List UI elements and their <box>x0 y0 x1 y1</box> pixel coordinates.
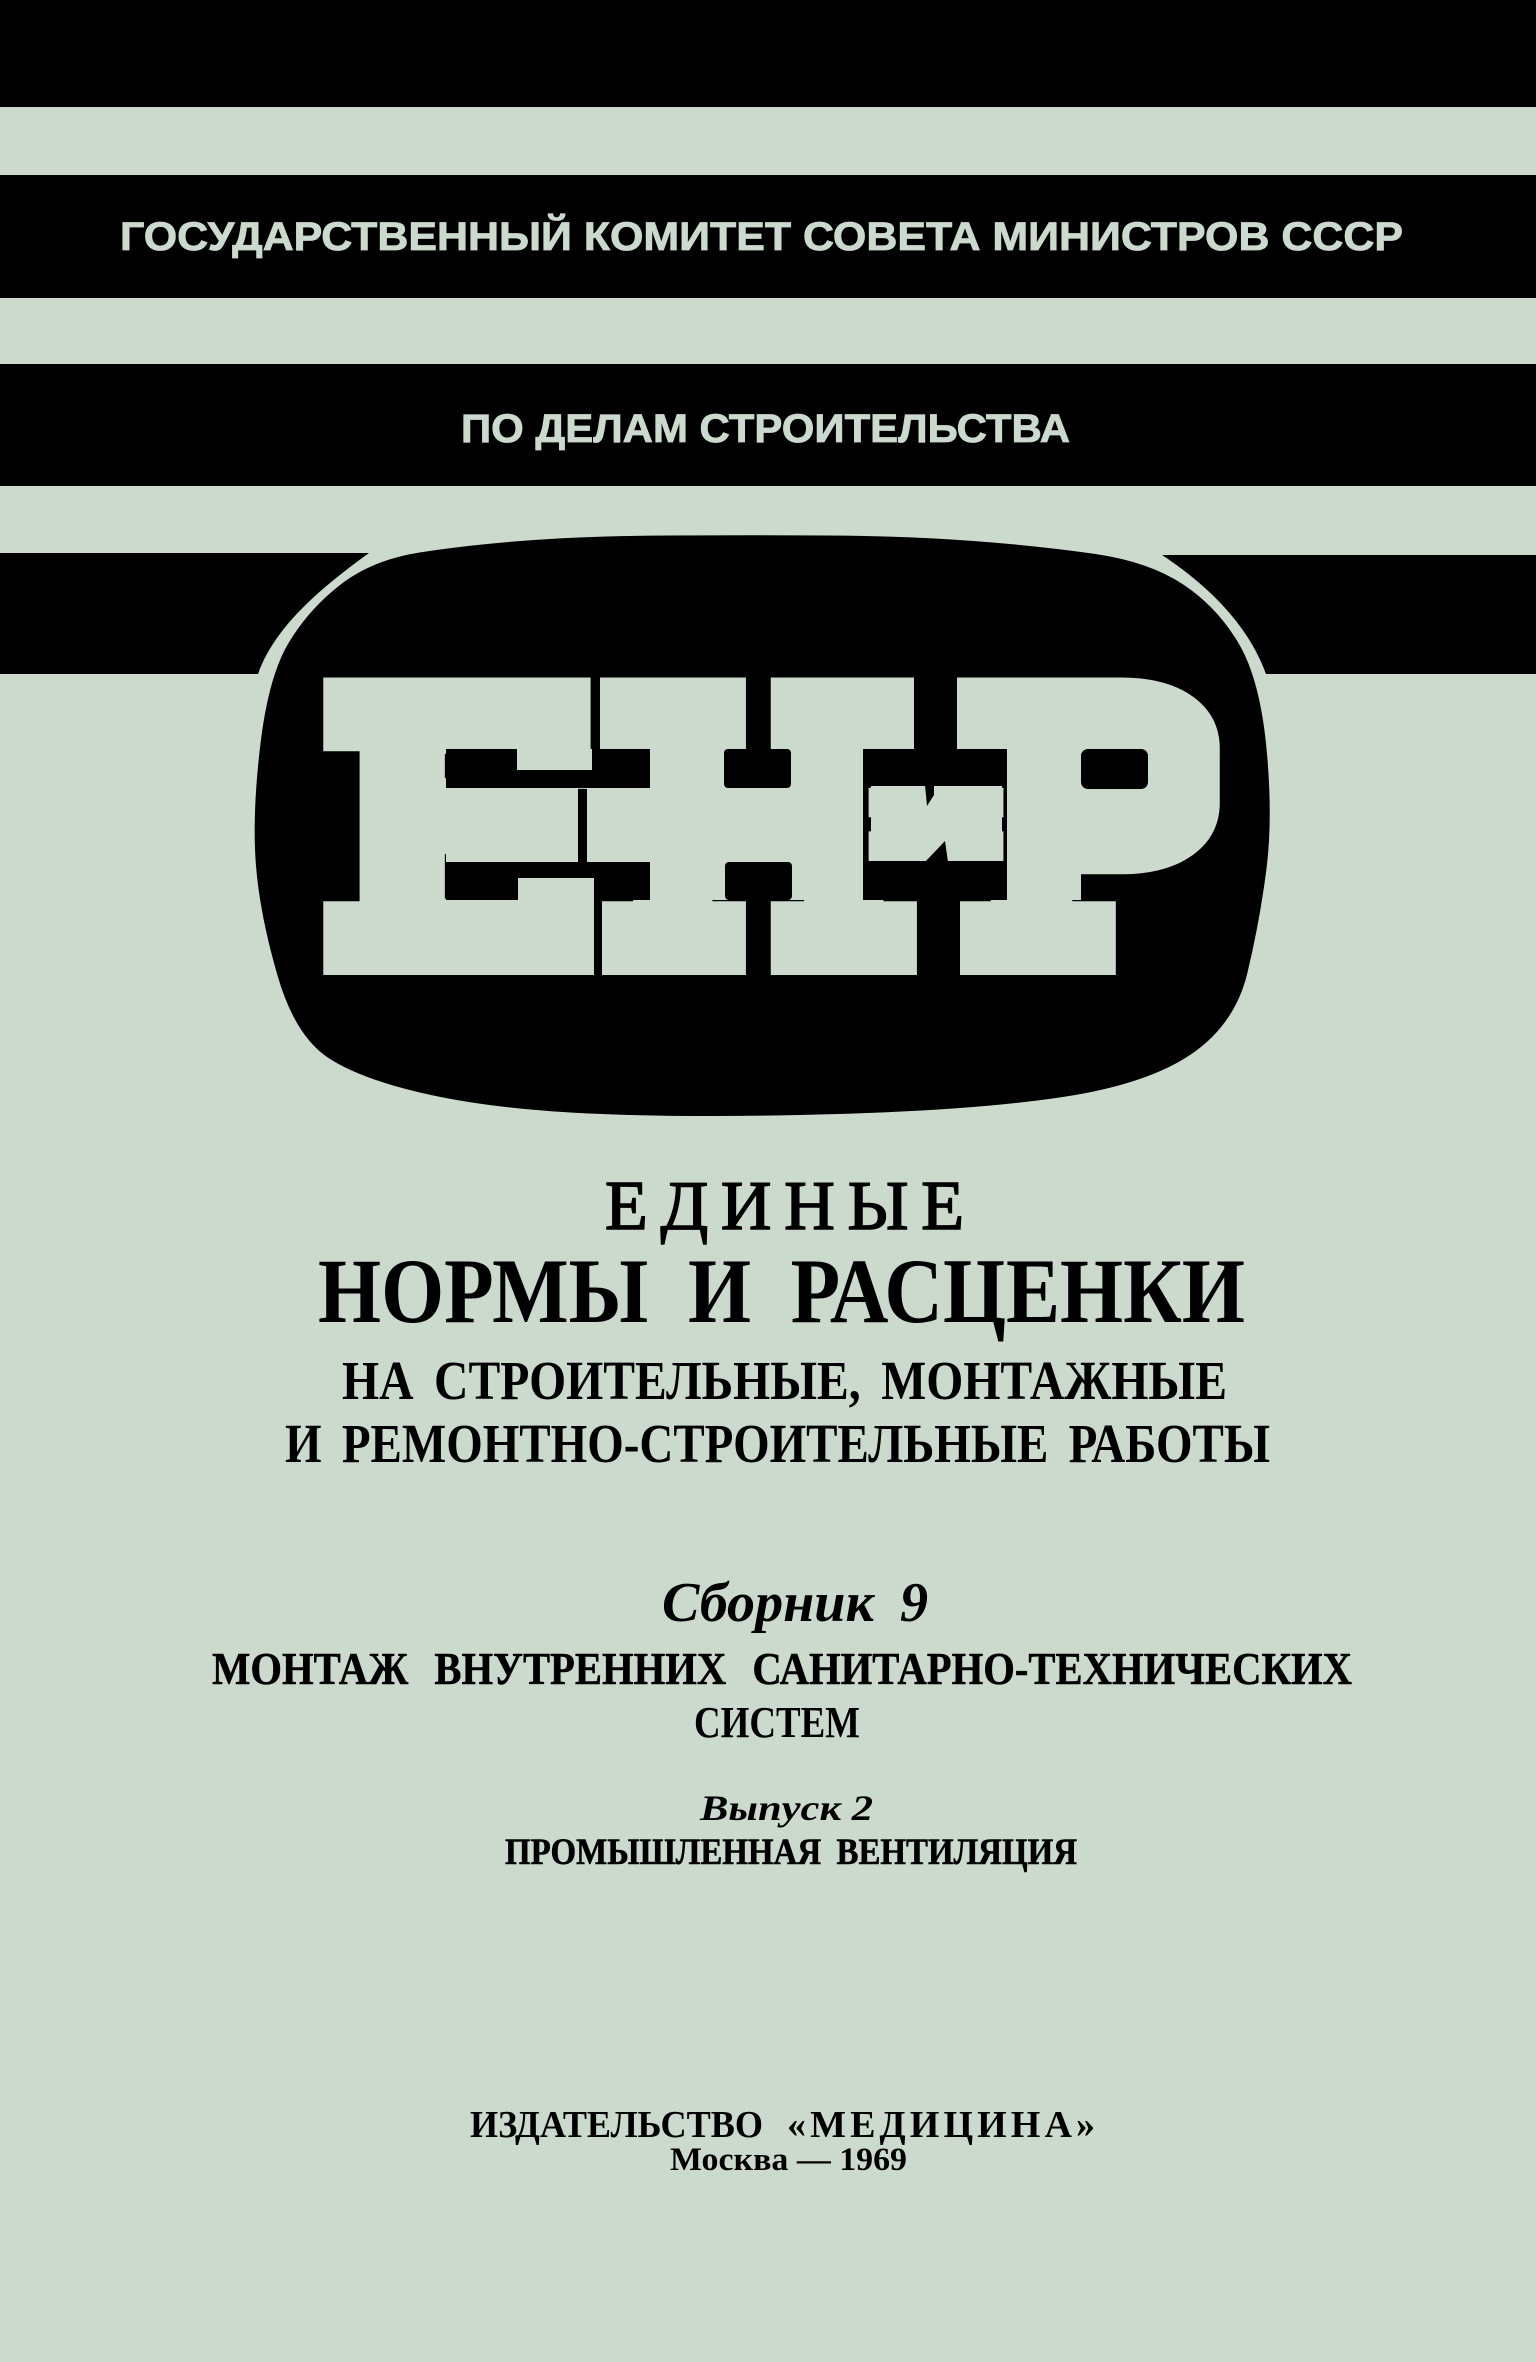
header band: construction affairs: ПО ДЕЛАМ СТРОИТЕЛЬСТВА <box>461 407 1070 451</box>
logo counters and joins between the letters <box>446 674 1162 975</box>
logo letter Н: Н <box>589 634 927 1027</box>
logo: ЕНиР oval emblem <box>255 535 1270 1116</box>
collection heading: Сборник 9 <box>662 1572 928 1634</box>
logo letter Р: Р <box>945 634 1223 1027</box>
publisher <box>470 2104 1095 2146</box>
header band: construction affairs <box>0 364 1536 486</box>
right band behind logo <box>1162 555 1536 674</box>
place and year: Москва — 1969 <box>670 2142 907 2178</box>
left band behind logo <box>0 553 369 674</box>
publisher: ИЗДАТЕЛЬСТВО <box>470 2104 763 2146</box>
logo letter Е: Е <box>311 634 608 1027</box>
logo letter и: и <box>875 761 997 872</box>
publisher: «МЕДИЦИНА» <box>787 2104 1095 2146</box>
collection title line 1: МОНТАЖ ВНУТРЕННИХ САНИТАРНО-ТЕХНИЧЕСКИХ <box>212 1643 1352 1694</box>
logo oval <box>255 535 1270 1116</box>
header band: committee name <box>0 175 1536 298</box>
subtitle line 1: НА СТРОИТЕЛЬНЫЕ, МОНТАЖНЫЕ <box>342 1350 1227 1411</box>
title line: НОРМЫ И РАСЦЕНКИ: НОРМЫ И РАСЦЕНКИ <box>318 1240 1245 1342</box>
collection title line 2: СИСТЕМ <box>694 1698 860 1747</box>
issue heading: Выпуск 2 <box>699 1788 873 1828</box>
logo letter и <box>871 761 1002 872</box>
issue title: ПРОМЫШЛЕННАЯ ВЕНТИЛЯЦИЯ <box>505 1832 1077 1873</box>
title line: ЕДИНЫЕ: ЕДИНЫЕ <box>605 1168 964 1245</box>
header band: committee name: ГОСУДАРСТВЕННЫЙ КОМИТЕТ СОВЕТА МИНИСТРОВ СССР <box>120 213 1403 259</box>
subtitle line 2: И РЕМОНТНО-СТРОИТЕЛЬНЫЕ РАБОТЫ <box>285 1413 1270 1474</box>
top black band <box>0 0 1536 107</box>
